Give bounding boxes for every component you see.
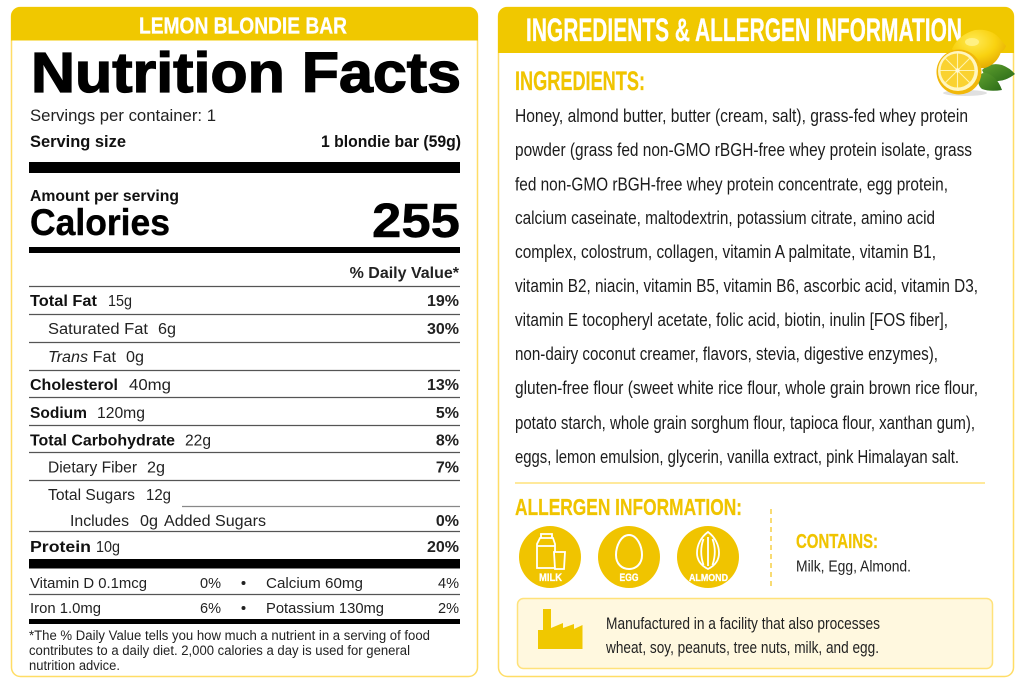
row: total carbohydrate: 8% [436, 432, 459, 450]
footnote: nutrition advice. [29, 658, 120, 673]
row: sodium: 5% [436, 405, 459, 422]
amount per serving: Amount per serving [30, 188, 179, 205]
header: product name: LEMON BLONDIE BAR [139, 12, 347, 38]
row: saturated fat: Saturated Fat [48, 321, 149, 338]
row: saturated fat [48, 321, 459, 338]
footnote [29, 628, 430, 673]
row: trans fat [48, 349, 144, 366]
row: iron and potassium: 2% [438, 600, 459, 617]
row: sodium: Sodium [30, 405, 87, 422]
row: iron and potassium [30, 600, 459, 617]
row: trans fat: 0g [126, 349, 144, 366]
footnote: contributes to a daily diet. 2,000 calories a day is used for general [29, 643, 410, 658]
row: cholesterol: 40mg [129, 377, 171, 394]
heading: allergen information: ALLERGEN INFORMATION: [515, 494, 742, 520]
row: cholesterol: 13% [427, 377, 459, 394]
row: protein: 20% [427, 539, 459, 556]
heading: ingredients: INGREDIENTS: [515, 66, 645, 96]
row: added sugars: Added Sugars [164, 513, 266, 530]
row: iron and potassium: 6% [200, 600, 221, 617]
icon: milk: MILK [539, 572, 562, 584]
row: total carbohydrate [30, 432, 459, 450]
row: added sugars: 0g [140, 513, 158, 530]
row: added sugars: Includes [70, 513, 129, 530]
icon: almond [677, 526, 739, 588]
icon: milk [519, 526, 581, 588]
ingredients list: non-dairy coconut creamer, flavors, stevia, digestive enzymes), [515, 343, 938, 364]
row: protein [30, 539, 459, 556]
notice text: Manufactured in a facility that also processes [606, 615, 880, 633]
callout: facility notice [518, 598, 992, 668]
row: saturated fat: 6g [158, 321, 176, 338]
servings per container: Servings per container: 1 [30, 107, 216, 125]
row: saturated fat: 30% [427, 321, 459, 338]
ingredients list: vitamin E tocopheryl acetate, folic acid, biotin, inulin [FOS fiber], [515, 309, 948, 330]
serving size row: Serving size [30, 133, 126, 151]
contains: Milk, Egg, Almond. [796, 558, 911, 576]
header: product name [11, 7, 478, 40]
icon: egg: EGG [620, 572, 638, 584]
row: total sugars: Total Sugars [48, 487, 135, 504]
row: vitamin D and calcium: 4% [438, 575, 459, 592]
ingredients list [515, 105, 978, 467]
row: cholesterol [30, 377, 459, 394]
calories row: Calories [30, 202, 170, 243]
calories row [30, 195, 460, 248]
row: total sugars: 12g [146, 487, 171, 504]
row: sodium [30, 405, 459, 422]
panel: nutrition facts [11, 7, 478, 676]
row: protein: Protein [30, 539, 91, 556]
serving size row [30, 133, 461, 151]
row: dietary fiber: 2g [147, 460, 165, 476]
notice text [605, 615, 880, 657]
row: trans fat: Trans Fat [48, 349, 117, 366]
footnote: *The % Daily Value tells you how much a nutrient in a serving of food [29, 628, 430, 643]
contains [796, 531, 911, 576]
daily value heading: % Daily Value* [350, 265, 460, 282]
row: added sugars [70, 513, 459, 530]
icon: egg [598, 526, 660, 588]
row: total fat [30, 293, 459, 310]
heading: Nutrition Facts: Nutrition Facts [31, 41, 461, 105]
row: protein: 10g [96, 539, 120, 556]
row: cholesterol: Cholesterol [30, 377, 118, 394]
icon: lemon [936, 30, 1015, 96]
row: dietary fiber [48, 460, 459, 476]
row: total carbohydrate: 22g [185, 432, 211, 450]
row: dietary fiber: 7% [436, 460, 459, 476]
row: vitamin D and calcium: 0% [200, 575, 221, 592]
icon: factory [538, 609, 582, 649]
notice text: wheat, soy, peanuts, tree nuts, milk, and egg. [605, 639, 879, 657]
ingredients list: complex, colostrum, collagen, vitamin A palmitate, vitamin B1, [515, 241, 936, 262]
row: iron and potassium: Iron 1.0mg [30, 600, 101, 617]
row: iron and potassium: Potassium 130mg [266, 600, 384, 617]
ingredients list: calcium caseinate, maltodextrin, potassium citrate, amino acid [515, 207, 935, 228]
row: vitamin D and calcium [30, 575, 459, 592]
row: sodium: 120mg [97, 405, 145, 422]
row: dietary fiber: Dietary Fiber [48, 460, 137, 476]
ingredients list: fed non-GMO rBGH-free whey protein concentrate, egg protein, [515, 174, 948, 194]
row: total fat: 15g [108, 293, 132, 310]
row: vitamin D and calcium: Vitamin D 0.1mcg [30, 575, 147, 592]
contains: CONTAINS: [796, 531, 878, 553]
serving size row: 1 blondie bar (59g) [321, 133, 461, 151]
row: total fat: Total Fat [30, 293, 98, 310]
row: vitamin D and calcium: Calcium 60mg [266, 575, 363, 592]
row: total fat: 19% [427, 293, 459, 310]
icon: almond: ALMOND [689, 572, 728, 584]
calories row: 255 [372, 195, 460, 248]
panel: ingredients and allergens [498, 7, 1015, 676]
row: total carbohydrate: Total Carbohydrate [30, 432, 175, 450]
row: added sugars: 0% [436, 513, 459, 530]
